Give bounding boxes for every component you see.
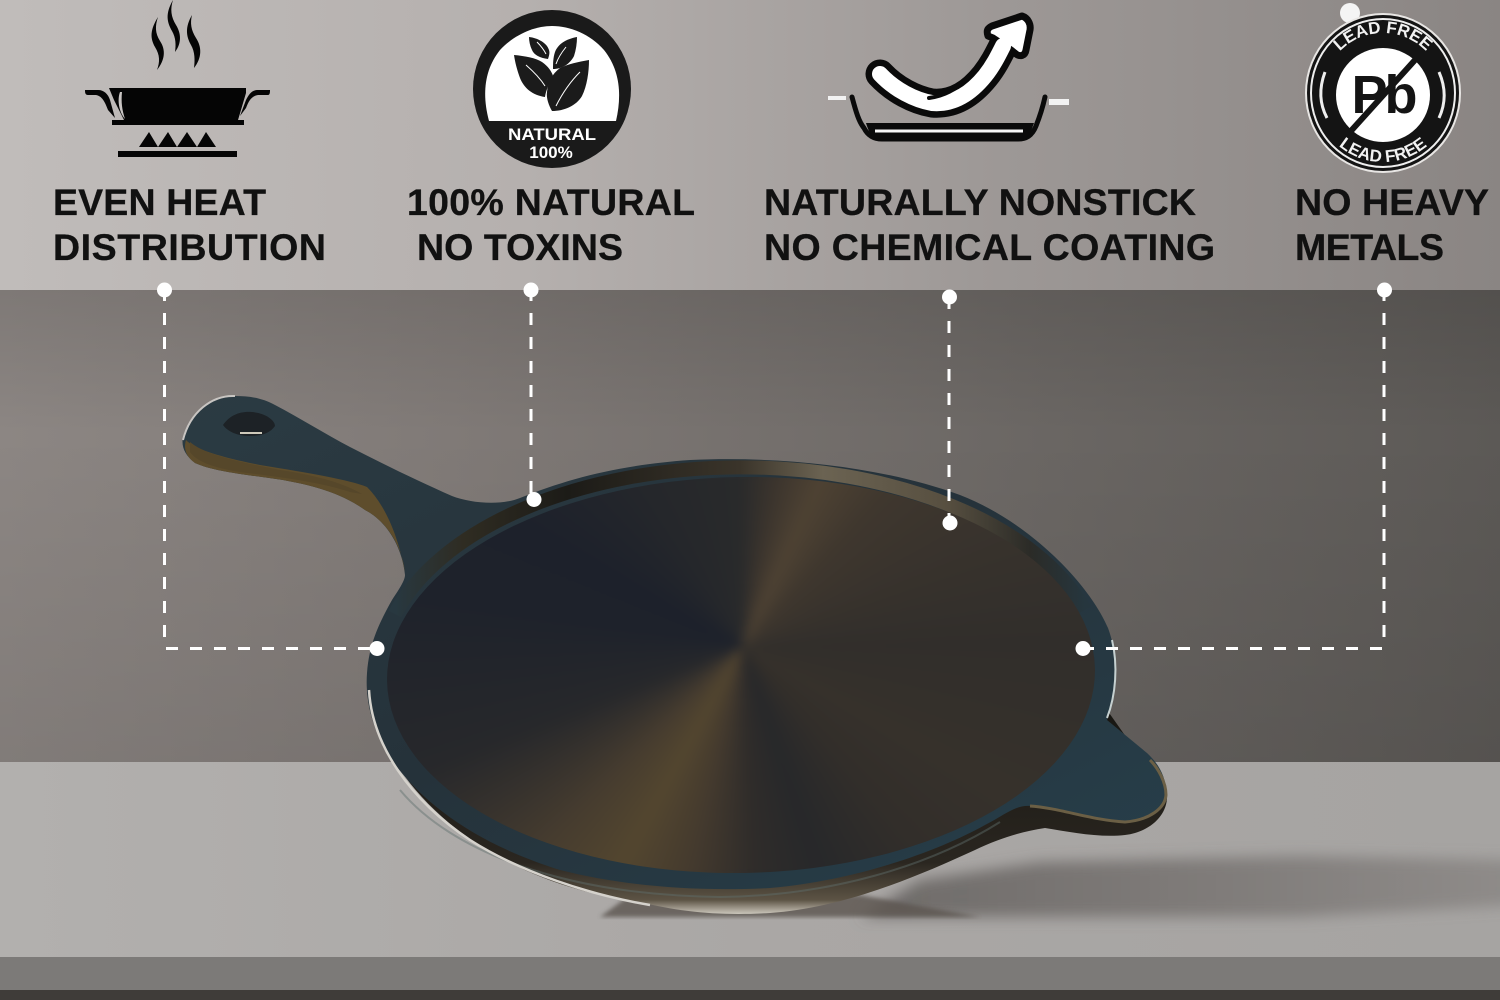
icon: natural badge: NATURAL xyxy=(508,126,596,144)
heading: natural no toxins: NO TOXINS xyxy=(417,226,623,268)
background: wall xyxy=(0,290,1500,765)
heading: no heavy metals xyxy=(1295,181,1489,268)
shadow on table xyxy=(600,856,1500,917)
handle gold underside xyxy=(185,440,405,572)
heading: naturally nonstick: NATURALLY NONSTICK xyxy=(764,181,1196,223)
line: even heat horizontal xyxy=(166,647,377,650)
bottom rim texture xyxy=(400,790,1000,897)
pan body and handle xyxy=(182,396,1166,889)
heading: even heat distribution: DISTRIBUTION xyxy=(53,226,326,268)
lug speckle edge xyxy=(1030,760,1166,822)
line: even heat xyxy=(163,289,166,642)
pan cooking surface xyxy=(387,477,1095,873)
pan xyxy=(182,396,1167,914)
rim silver edge xyxy=(369,690,650,905)
icon: natural badge: 100% xyxy=(529,143,573,162)
line: natural xyxy=(530,289,532,497)
heading: naturally nonstick: NO CHEMICAL COATING xyxy=(764,226,1215,268)
icon: lead free badge: LEAD FREE xyxy=(1340,137,1427,162)
header band xyxy=(0,0,1500,290)
heading: no heavy metals: METALS xyxy=(1295,226,1444,268)
line: nonstick xyxy=(948,297,950,522)
line: no heavy metals horizontal xyxy=(1082,647,1385,650)
callout lines xyxy=(164,289,1385,648)
table edge xyxy=(0,957,1500,1000)
handle hole xyxy=(223,412,275,436)
heading: even heat distribution xyxy=(53,181,326,268)
icon: lead free badge: Pb xyxy=(1351,65,1416,125)
icon: pan on flame xyxy=(85,0,270,157)
heading: no heavy metals: NO HEAVY xyxy=(1295,181,1489,223)
icon: lead free badge: LEAD FREE xyxy=(1332,21,1434,51)
icon: lead free badge xyxy=(1305,3,1461,173)
line: no heavy metals xyxy=(1382,289,1386,642)
icon: nonstick arrow and tray xyxy=(828,16,1069,141)
pan rim lip xyxy=(395,467,1085,614)
table top xyxy=(0,762,1500,958)
heading: even heat distribution: EVEN HEAT xyxy=(53,181,266,223)
heading: natural no toxins xyxy=(407,181,695,268)
handle highlight edge xyxy=(183,396,235,440)
leaf veins xyxy=(526,42,580,106)
callout dots xyxy=(157,282,1392,656)
icon: natural badge xyxy=(473,10,631,168)
heading: naturally nonstick xyxy=(764,181,1215,268)
pan underside xyxy=(367,680,1167,914)
heading: natural no toxins: 100% NATURAL xyxy=(407,181,695,223)
